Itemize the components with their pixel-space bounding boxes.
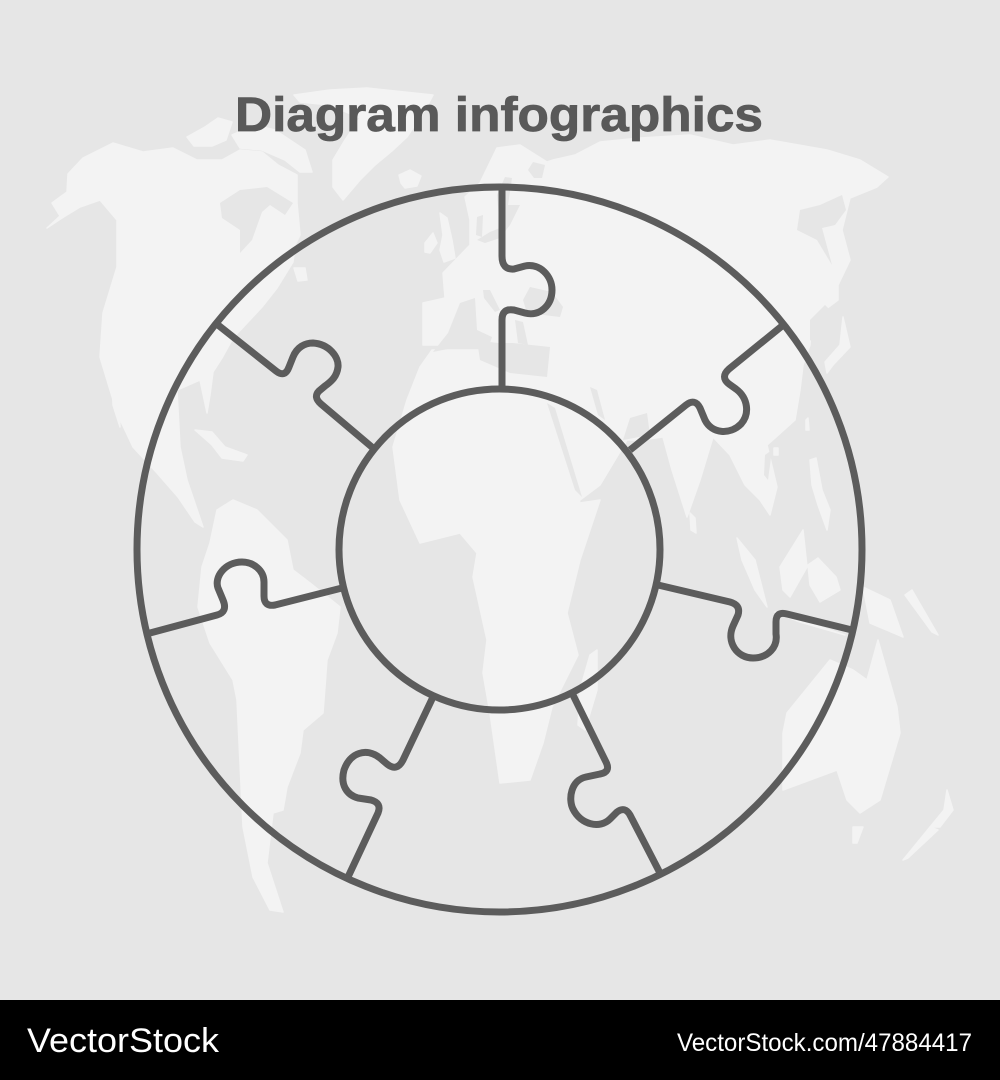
title: Diagram infographics <box>235 89 763 142</box>
footer url text: VectorStock.com/47884417 <box>677 1029 972 1057</box>
puzzle connector: bottom left <box>343 697 433 877</box>
puzzle connector: left <box>150 562 342 633</box>
outer ring <box>137 187 862 912</box>
puzzle connector: bottom right <box>571 695 660 873</box>
puzzle ring diagram <box>137 187 862 912</box>
puzzle connector: lower right <box>658 585 852 658</box>
puzzle connector: upper right <box>630 326 782 450</box>
footer bar <box>0 1000 1000 1080</box>
puzzle connector: top <box>502 187 552 388</box>
world map background <box>47 88 953 912</box>
footer logo text: VectorStock <box>27 1022 220 1060</box>
puzzle connector: upper left <box>218 325 373 448</box>
central circle <box>339 389 660 710</box>
